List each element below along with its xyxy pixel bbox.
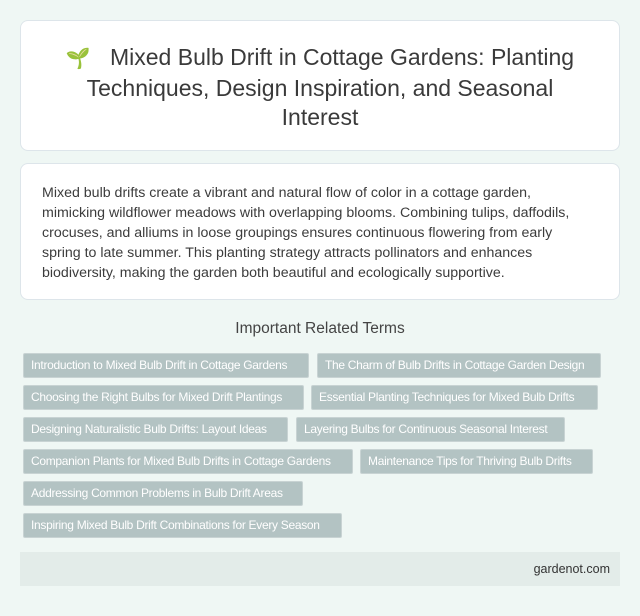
heading: related terms: Important Related Terms	[235, 320, 405, 337]
tag	[23, 385, 304, 410]
tag: Addressing Common Problems in Bulb Drift Areas	[31, 486, 283, 500]
footer: gardenot.com	[534, 562, 610, 576]
tag	[23, 353, 309, 378]
tag: Inspiring Mixed Bulb Drift Combinations for Every Season	[31, 518, 320, 532]
description card	[20, 163, 620, 300]
tag	[360, 449, 593, 474]
tag	[23, 417, 288, 442]
tag	[296, 417, 565, 442]
tag	[23, 481, 303, 506]
description card: Mixed bulb drifts create a vibrant and natural flow of color in a cottage garden,	[42, 185, 531, 201]
description card: crocuses, and alliums in loose groupings ensures continuous flowering from early	[42, 225, 552, 241]
tag	[23, 449, 353, 474]
description card: spring to late summer. This planting strategy attracts pollinators and enhances	[42, 245, 532, 261]
title card	[20, 20, 620, 151]
tag: Essential Planting Techniques for Mixed Bulb Drifts	[319, 390, 574, 404]
tag: Choosing the Right Bulbs for Mixed Drift Plantings	[31, 390, 282, 404]
tag: Introduction to Mixed Bulb Drift in Cottage Gardens	[31, 358, 287, 372]
description card: biodiversity, making the garden both beautiful and ecologically supportive.	[42, 265, 505, 281]
tag: Companion Plants for Mixed Bulb Drifts in Cottage Gardens	[31, 454, 331, 468]
tag	[317, 353, 601, 378]
tag: The Charm of Bulb Drifts in Cottage Garden Design	[325, 358, 584, 372]
title card: 🌱 Mixed Bulb Drift in Cottage Gardens: Planting Techniques, Design Inspiration, and Seasonal Interest	[66, 44, 574, 130]
tag	[23, 513, 342, 538]
tag: Layering Bulbs for Continuous Seasonal Interest	[304, 422, 547, 436]
tag	[311, 385, 598, 410]
description card: mimicking wildflower meadows with overlapping blooms. Combining tulips, daffodils,	[42, 205, 569, 221]
tag: Maintenance Tips for Thriving Bulb Drifts	[368, 454, 572, 468]
tag: Designing Naturalistic Bulb Drifts: Layout Ideas	[31, 422, 267, 436]
footer	[20, 552, 620, 586]
